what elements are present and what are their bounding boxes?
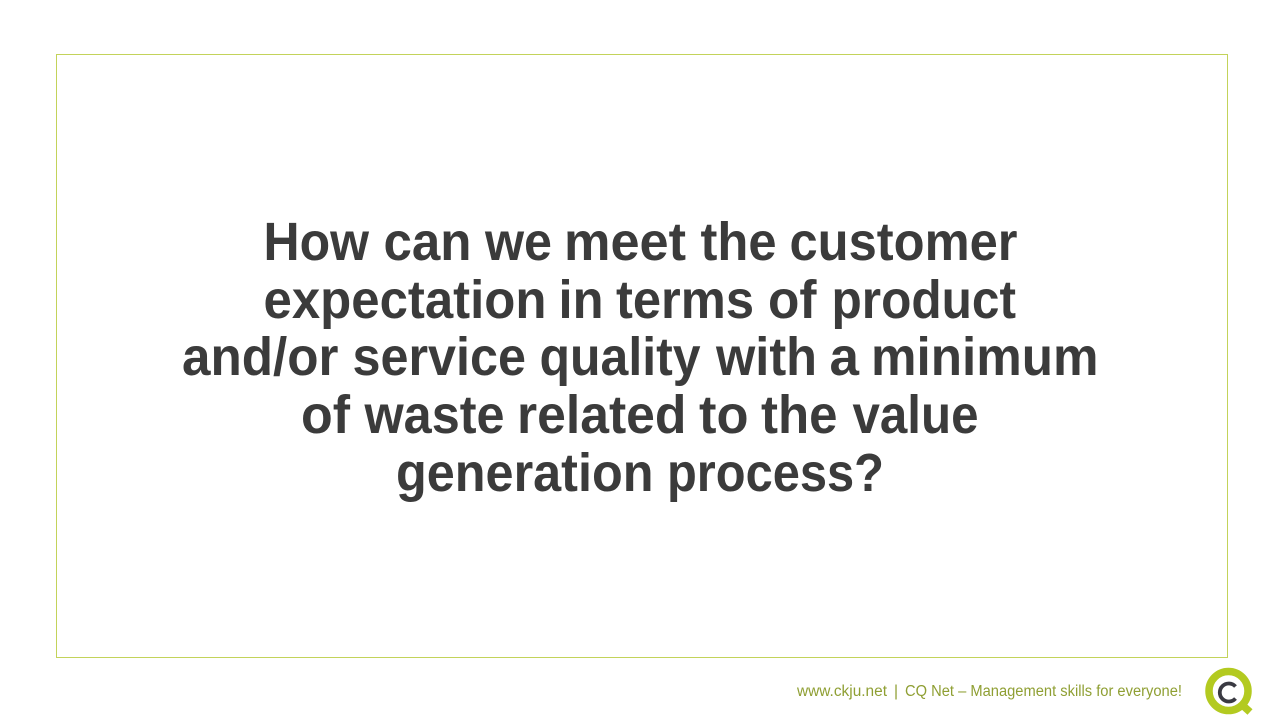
title: central question: quality xyxy=(540,327,700,387)
title: central question: terms xyxy=(616,270,754,330)
title: central question: a xyxy=(830,327,860,387)
title: central question: generation xyxy=(396,443,654,503)
footer text: www.ckju.net xyxy=(796,683,888,700)
footer text: CQ Net – Management skills for everyone! xyxy=(905,683,1182,700)
title: central question: of xyxy=(301,385,351,445)
title: central question: to xyxy=(699,385,748,445)
title: central question: related xyxy=(517,385,686,445)
title: central question: value xyxy=(852,385,978,445)
title: central question: expectation xyxy=(264,270,546,330)
footer text xyxy=(796,683,1182,700)
title: central question: How xyxy=(264,212,370,272)
title: central question: the xyxy=(761,385,838,445)
footer text: | xyxy=(894,683,898,700)
title: central question: product xyxy=(832,270,1016,330)
title: central question: with xyxy=(715,327,817,387)
title: central question xyxy=(182,212,1098,503)
title: central question: service xyxy=(352,327,526,387)
title: central question: in xyxy=(558,270,604,330)
title: central question: of xyxy=(768,270,817,330)
title: central question: minimum xyxy=(871,327,1098,387)
title: central question: the xyxy=(700,212,776,272)
title: central question: and/or xyxy=(182,327,338,387)
title: central question: meet xyxy=(564,212,686,272)
icon: CQ logo xyxy=(1209,672,1250,712)
title: central question: can xyxy=(384,212,472,272)
title: central question: waste xyxy=(364,385,504,445)
title: central question: process? xyxy=(667,443,884,503)
panel: outlined frame xyxy=(56,54,1228,658)
title: central question: we xyxy=(484,212,552,272)
title: central question: customer xyxy=(790,212,1018,272)
